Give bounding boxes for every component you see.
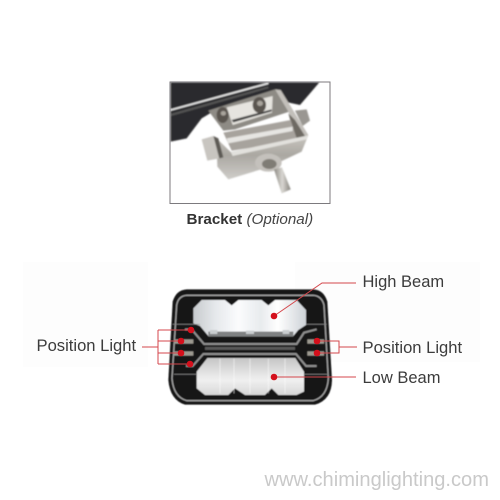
callout: position light left: Position Light bbox=[36, 336, 137, 355]
chrome rim bbox=[172, 295, 328, 401]
horizontal chrome lines bbox=[173, 324, 328, 374]
bracket base bbox=[217, 135, 308, 179]
callout: low beam bbox=[271, 369, 440, 387]
lamp body bbox=[168, 289, 332, 405]
bolt bbox=[274, 167, 291, 193]
photo frame bbox=[170, 82, 330, 204]
position light guides bbox=[185, 329, 317, 366]
bracket back plate bbox=[208, 89, 289, 131]
callout: high beam: High Beam bbox=[362, 273, 444, 291]
bracket right bolt bbox=[295, 109, 310, 126]
bracket right arm and interior bbox=[275, 89, 308, 141]
lamp housing in photo bbox=[171, 82, 319, 142]
website watermark: www.chiminglighting.com bbox=[264, 469, 489, 491]
callout: low beam: Low Beam bbox=[362, 369, 440, 387]
screws bbox=[217, 107, 229, 123]
bracket caption: Bracket (Optional) bbox=[186, 211, 313, 228]
faint watermark behind lamp bbox=[23, 262, 480, 367]
high beam lens bbox=[193, 300, 306, 336]
callout: position light left bbox=[36, 327, 194, 367]
callout: high beam bbox=[271, 273, 444, 319]
panel: bracket photo bbox=[170, 82, 330, 204]
callout: position light right bbox=[314, 338, 463, 357]
bracket crossbar bbox=[223, 120, 297, 151]
nut bbox=[255, 154, 282, 172]
low beam lens bbox=[197, 358, 304, 395]
lamp illustration bbox=[168, 289, 332, 405]
callout: position light right: Position Light bbox=[362, 338, 463, 357]
